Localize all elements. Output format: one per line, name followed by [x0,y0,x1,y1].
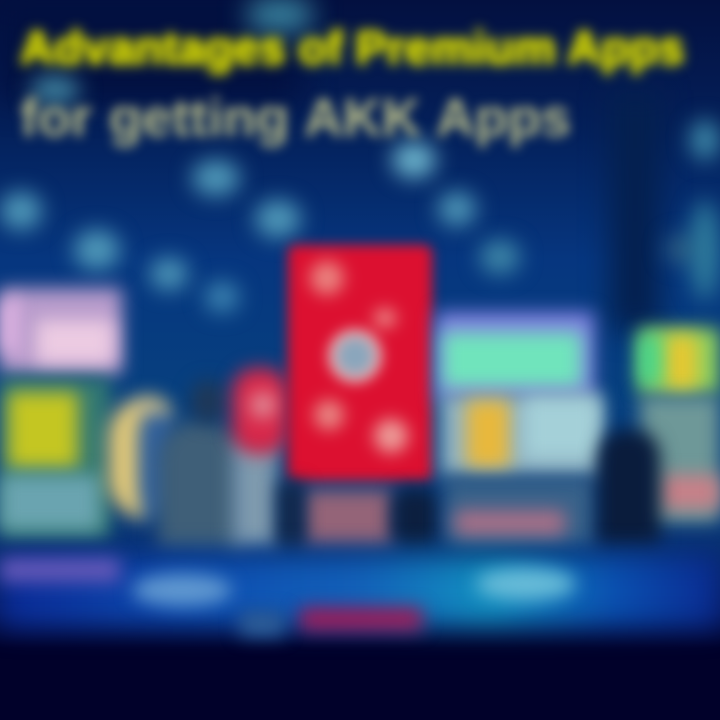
title line 1: Advantages of Premium Apps [20,21,684,74]
far right yellow [664,335,698,390]
far right pink [660,475,720,509]
centre lower block [303,490,393,544]
right billboard mint [442,332,582,388]
left lower panel [0,378,110,538]
lower pink strip [455,510,565,536]
small red phone [232,368,288,454]
right billboard [436,312,594,400]
dark figure left of centre [278,482,304,548]
person left [150,374,288,556]
left billboard accent [0,298,16,354]
left billboard highlights [36,320,114,364]
right lower panel [445,478,595,544]
right dark streak [610,90,660,330]
left lower tile [0,475,100,530]
floor glow [0,556,720,626]
cream arc icon [108,396,174,520]
floor right light [476,568,576,600]
floating data dots [0,64,720,322]
title [12,20,692,155]
blue tile [524,398,598,458]
small red phone dot [250,392,276,418]
dark figure right [598,430,660,546]
red phone [278,235,442,490]
lime tile [8,392,78,468]
top left dark corner [0,0,300,100]
floor left light [132,574,232,606]
far right green [638,335,660,385]
floor left corner light [0,558,120,582]
phone icon dots [310,261,344,295]
far right billboard [640,328,720,394]
far right lower panel [640,396,720,522]
dark figure centre [392,488,438,546]
left billboard pink [0,288,122,374]
floor centre small light [240,612,284,636]
teal beam top [250,0,310,30]
title line 2: for getting AKK Apps [20,88,571,148]
floor red reflection [300,608,422,630]
phone central icon [328,329,382,383]
right billboard lower panel [440,394,602,476]
orange tile [466,400,510,468]
